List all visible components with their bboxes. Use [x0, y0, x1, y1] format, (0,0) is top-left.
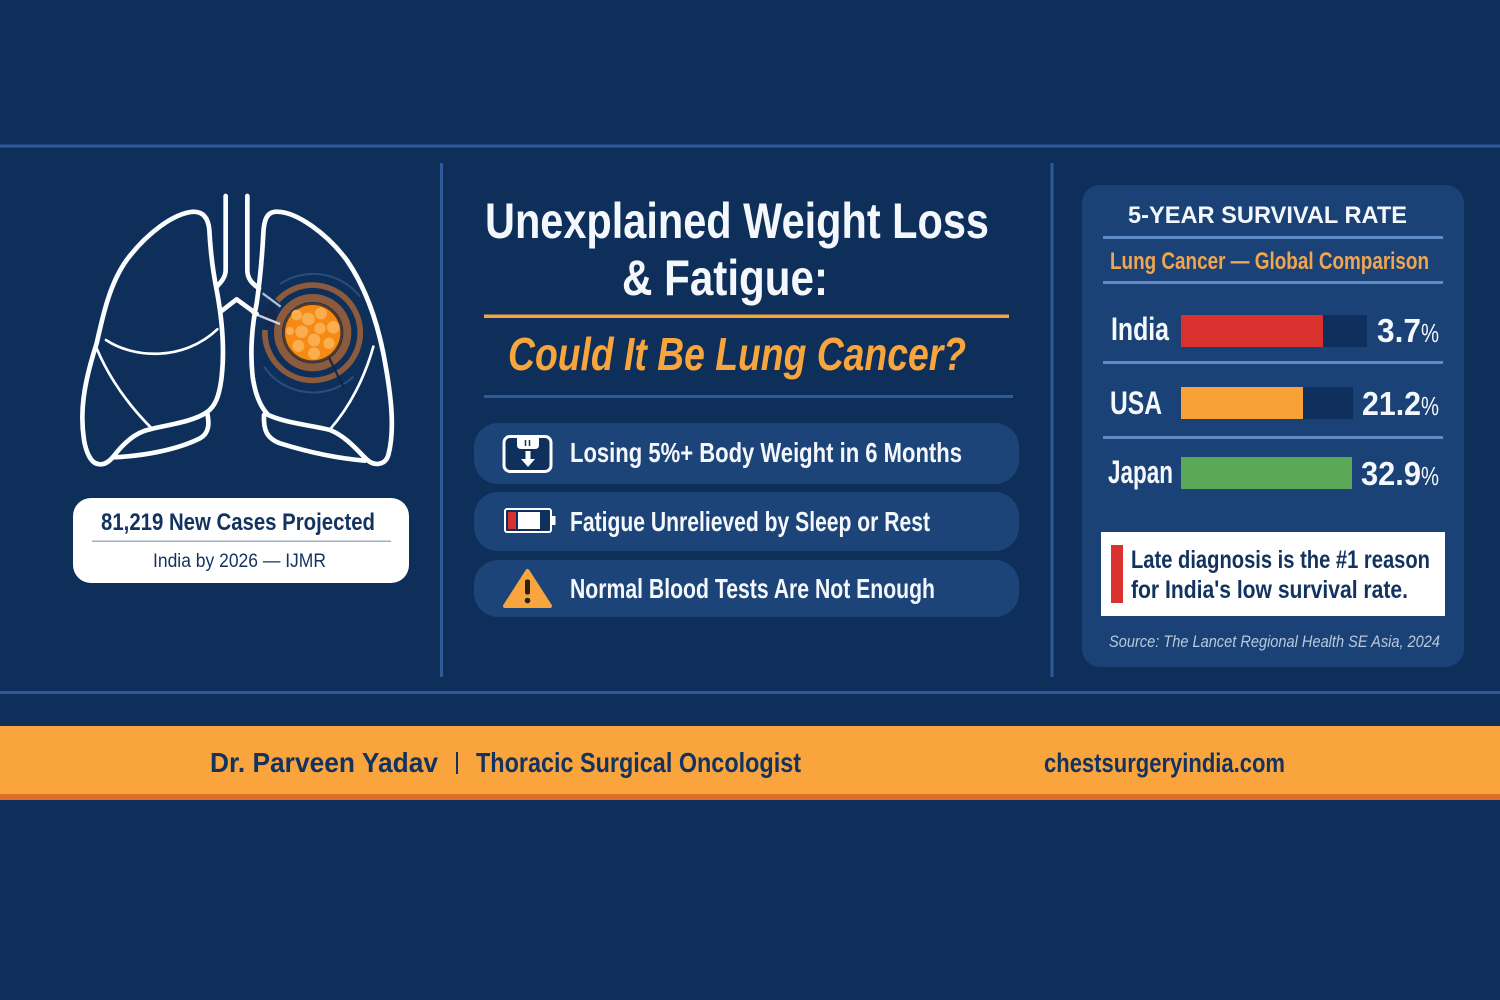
callout: late diagnosis: for India's low survival rate.: [1131, 576, 1408, 604]
row: USA: [1110, 385, 1439, 422]
row: Japan: Japan: [1108, 454, 1173, 490]
row: USA: 21.2: [1362, 385, 1421, 422]
symptom: weight loss: [474, 423, 1019, 484]
symptom: weight loss: Losing 5%+ Body Weight in 6 Months: [570, 437, 962, 468]
callout: late diagnosis: Late diagnosis is the #1 reason: [1131, 546, 1430, 574]
panel heading: 5-YEAR SURVIVAL RATE: [1128, 202, 1407, 229]
row: India: 3.7: [1377, 312, 1421, 349]
row: India: [1111, 311, 1439, 349]
subtitle: Could It Be Lung Cancer?: [508, 328, 966, 380]
panel: survival rate: [1082, 185, 1464, 667]
symptom: fatigue: Fatigue Unrelieved by Sleep or Rest: [570, 506, 930, 537]
row: Japan: %: [1421, 461, 1439, 491]
symptom: fatigue: [474, 492, 1019, 551]
panel: headline and symptoms: [474, 193, 1019, 617]
tumour rings: [252, 274, 360, 393]
row: USA: USA: [1110, 385, 1162, 421]
bar chart: survival by country: [1103, 311, 1443, 492]
author name: Dr. Parveen Yadav: [210, 747, 438, 778]
title: Unexplained Weight Loss: [485, 193, 989, 249]
callout: new cases: 81,219 New Cases Projected: [101, 509, 375, 536]
callout: new cases: India by 2026 — IJMR: [153, 551, 326, 572]
row: Japan: 32.9: [1361, 455, 1421, 492]
author role: Thoracic Surgical Oncologist: [476, 747, 801, 778]
symptom: blood tests: [474, 560, 1019, 617]
symptom: blood tests: Normal Blood Tests Are Not Enough: [570, 573, 935, 604]
title: & Fatigue:: [622, 250, 828, 306]
website: chestsurgeryindia.com: [1044, 748, 1285, 778]
row: India: India: [1111, 311, 1169, 347]
source note: Source: The Lancet Regional Health SE Asia, 2024: [1109, 632, 1440, 651]
callout: late diagnosis: [1101, 532, 1445, 616]
footer band: [0, 726, 1500, 800]
row: Japan: [1108, 454, 1439, 492]
row: USA: %: [1421, 391, 1439, 421]
tumour: [283, 303, 343, 363]
row: India: %: [1421, 318, 1439, 348]
lung outlines: [82, 196, 392, 464]
title: [485, 193, 989, 306]
icon: warning triangle: [505, 571, 550, 606]
callout: new cases: [73, 498, 409, 583]
icon: lungs with tumour: [82, 196, 392, 464]
icon: scale with down arrow: [504, 436, 551, 472]
icon: low battery: [505, 509, 556, 532]
panel: lungs and case count: [73, 196, 409, 583]
